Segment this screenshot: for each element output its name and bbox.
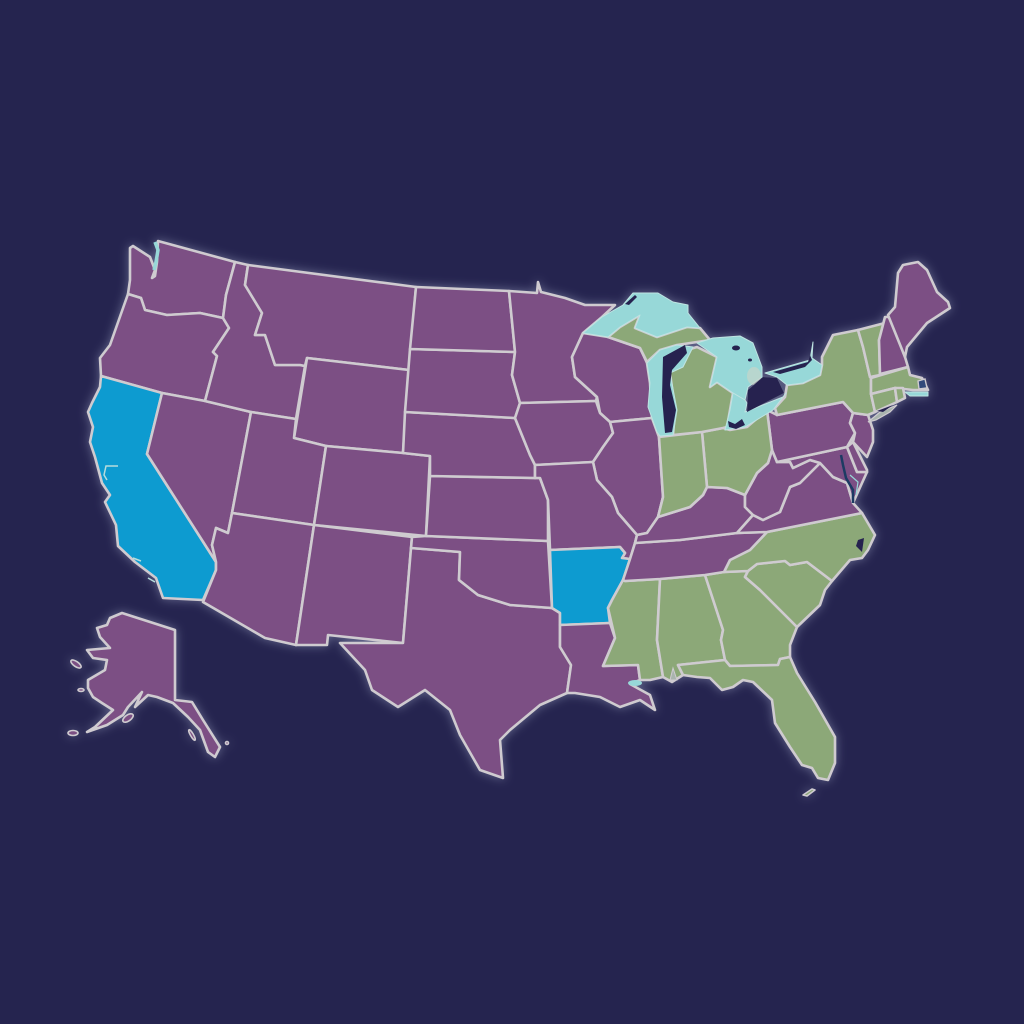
state: Rhode Island	[895, 388, 905, 402]
state: Pennsylvania	[767, 402, 855, 462]
Delaware Bay	[850, 475, 858, 495]
state: Michigan lower peninsula	[670, 347, 733, 435]
state: Wisconsin	[572, 333, 652, 422]
lake: dark water patch	[747, 377, 784, 412]
state: Arkansas	[550, 547, 630, 625]
state: Texas	[340, 548, 571, 778]
state: Michigan upper peninsula	[608, 315, 710, 362]
lake: Michigan dark water	[662, 345, 687, 433]
landmass with soft glow	[68, 241, 950, 796]
state: Washington	[128, 241, 235, 318]
Huron pale patch	[747, 367, 761, 385]
state: Oklahoma	[411, 536, 552, 608]
state: Kentucky	[635, 487, 753, 543]
lake: Erie	[725, 393, 786, 430]
San Francisco Bay	[104, 466, 118, 480]
Pamlico Sound	[856, 538, 864, 552]
state: Arizona	[203, 513, 314, 645]
state: Wyoming	[294, 358, 409, 453]
state: Tennessee	[623, 532, 767, 581]
state: Alaska	[87, 613, 220, 757]
state: New Mexico	[296, 525, 412, 645]
state: West Virginia	[745, 450, 820, 520]
state: Indiana	[658, 432, 707, 517]
Alaska islands	[68, 659, 228, 744]
state: California	[88, 376, 216, 600]
lake: Ontario	[765, 342, 822, 385]
state: Massachusetts	[871, 367, 928, 394]
state: South Dakota	[405, 349, 520, 418]
lake: Ontario dark streak	[773, 355, 812, 374]
Chesapeake Bay	[841, 455, 853, 503]
state: Louisiana	[560, 623, 655, 710]
contiguous and Alaska states	[68, 241, 950, 796]
Huron islands	[732, 346, 752, 362]
state: Mississippi	[603, 579, 663, 680]
state: Nebraska	[403, 412, 535, 478]
state: Delaware	[847, 442, 867, 472]
state: Montana	[245, 265, 416, 370]
state: Idaho	[205, 262, 305, 419]
state: North Dakota	[410, 287, 515, 352]
Puget Sound	[154, 242, 158, 270]
Lake Pontchartrain	[628, 680, 642, 686]
Great Lakes and coastal water	[104, 242, 928, 686]
state: Nevada	[147, 393, 251, 562]
lake: Superior dark streak	[625, 295, 637, 305]
state: New Hampshire	[879, 317, 908, 374]
state: Iowa	[515, 401, 613, 465]
Florida keys	[803, 789, 815, 796]
state: Missouri	[535, 462, 637, 559]
lake: Michigan	[647, 345, 693, 436]
Southern California islands	[133, 558, 155, 582]
state: Virginia	[737, 463, 862, 533]
lake: Huron	[697, 336, 762, 400]
state: Maryland	[777, 447, 867, 503]
lake: Erie dark inlet	[728, 419, 745, 429]
state: Minnesota	[509, 282, 615, 403]
state: Georgia	[705, 571, 797, 666]
lake: Superior	[583, 293, 700, 337]
state: Connecticut	[871, 388, 897, 412]
state: South Carolina	[745, 561, 832, 627]
Massachusetts islands	[905, 392, 928, 396]
state: Vermont	[858, 323, 886, 377]
Mobile Bay	[670, 668, 677, 680]
state: New York	[775, 330, 875, 415]
state: Florida	[678, 657, 835, 780]
state: Illinois	[593, 418, 663, 535]
state: Ohio	[702, 410, 772, 495]
Cape Cod	[918, 379, 927, 389]
state: New Jersey	[850, 413, 873, 457]
state: Maine	[888, 262, 950, 357]
Long Island Sound	[877, 405, 893, 412]
state: Utah	[232, 412, 326, 525]
state: Colorado	[314, 446, 430, 536]
state: Kansas	[426, 476, 548, 541]
state: Alabama	[657, 575, 725, 682]
state: Oregon	[100, 294, 229, 401]
Long Island	[868, 405, 897, 422]
state: North Carolina	[724, 513, 875, 581]
